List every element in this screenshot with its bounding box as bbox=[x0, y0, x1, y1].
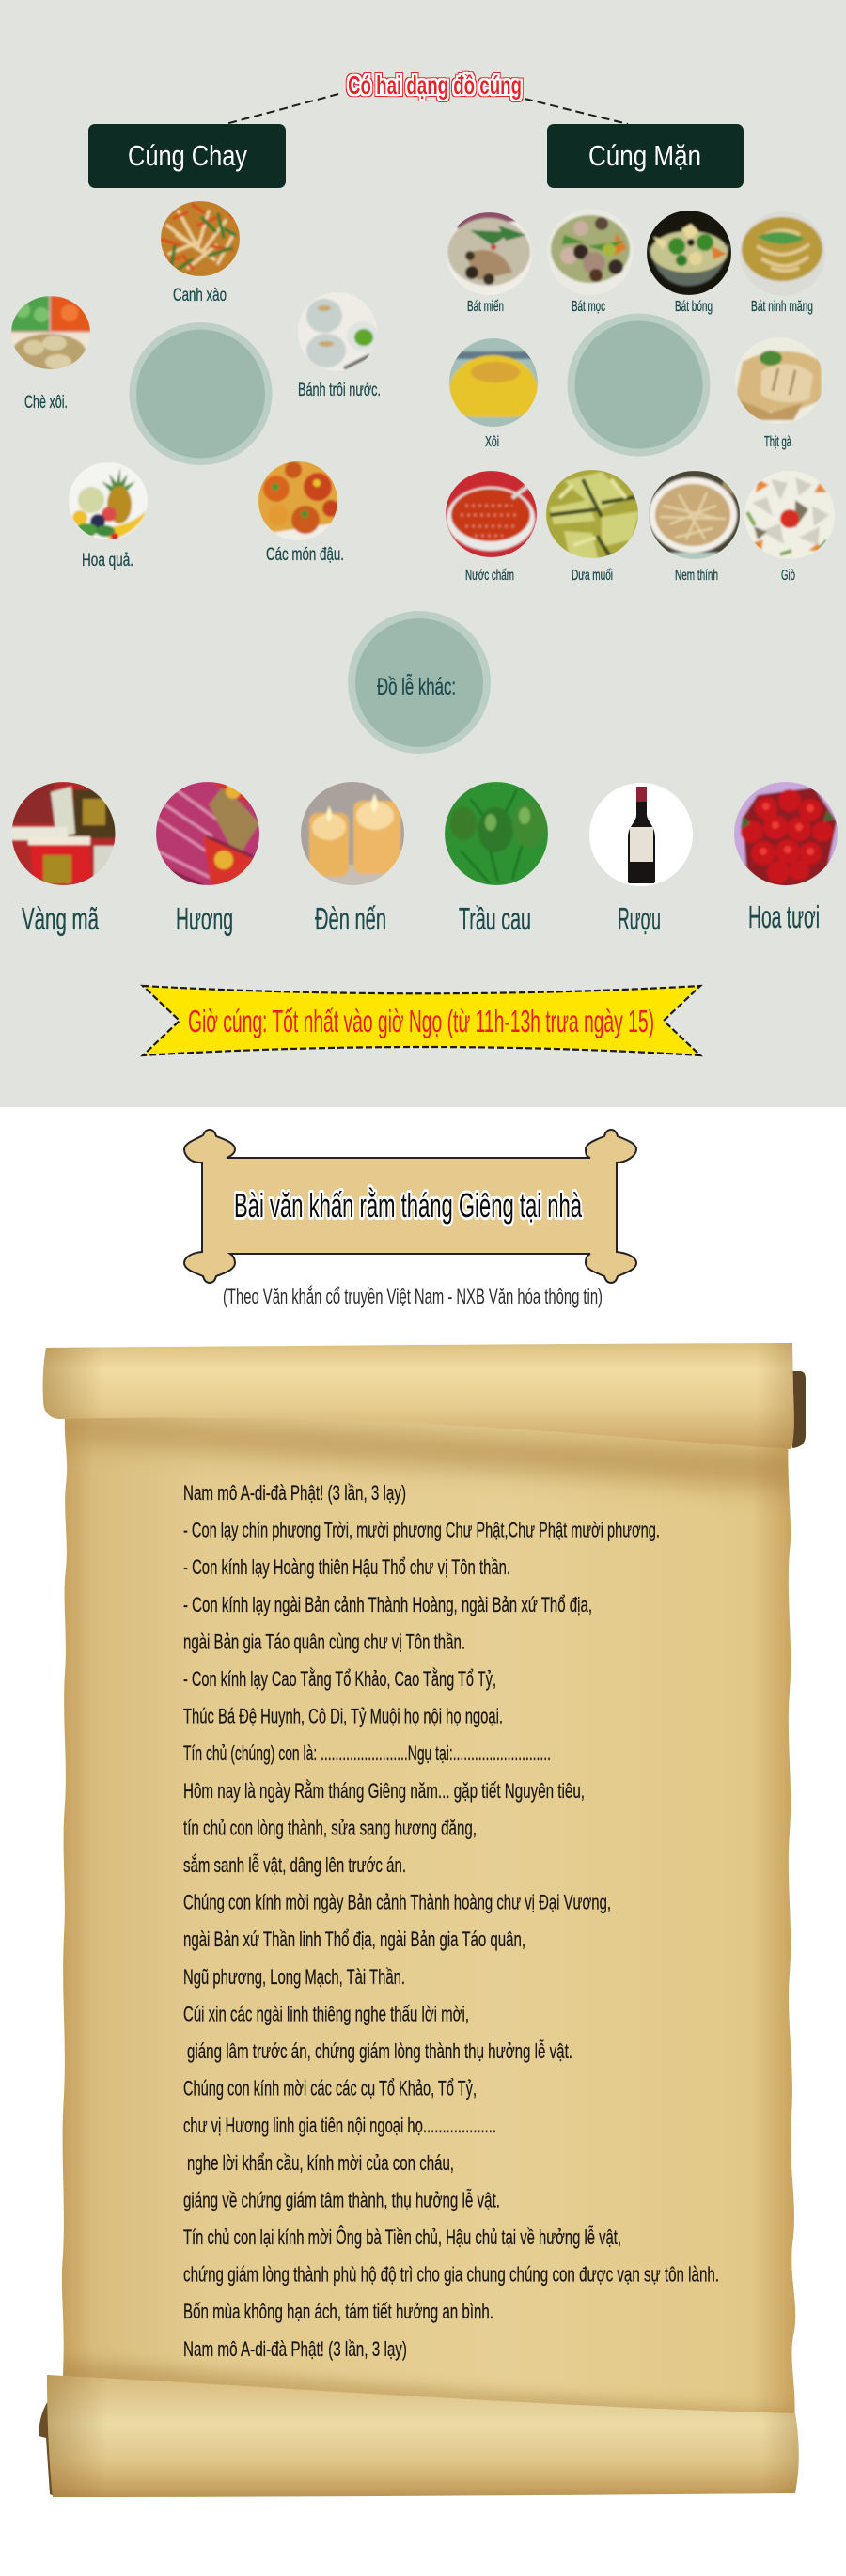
top roll back end bbox=[790, 1371, 806, 1448]
prayer text bbox=[183, 1481, 719, 2361]
icon: rice balls bbox=[297, 291, 379, 372]
icon: boiled chicken bbox=[734, 336, 824, 425]
panel: vegetarian offerings bbox=[10, 124, 381, 570]
label: Nước chấm bbox=[465, 568, 514, 584]
label: Vàng mã bbox=[22, 901, 99, 936]
icon: betel and areca bbox=[444, 781, 549, 888]
icon: sticky rice and sweet soup bbox=[10, 296, 91, 373]
icon: candles bbox=[300, 781, 405, 887]
label: Dưa muối bbox=[572, 568, 613, 584]
heading: Cúng Mặn bbox=[547, 124, 744, 188]
prayer text: Thúc Bá Đệ Huynh, Cô Di, Tỷ Muội họ nội họ ngoại. bbox=[183, 1705, 503, 1728]
prayer text: Tín chủ con lại kính mời Ông bà Tiền chủ, Hậu chủ tại về hưởng lễ vật, bbox=[183, 2225, 621, 2249]
item: Bát ninh măng bbox=[739, 211, 826, 315]
shadow below top roll bbox=[56, 1414, 799, 1490]
icon: shredded pork bbox=[648, 470, 741, 560]
item: Bát bóng bbox=[646, 210, 732, 315]
label: Bát mọc bbox=[572, 299, 605, 315]
icon: red roses bbox=[733, 781, 838, 887]
label: Các món đậu. bbox=[266, 545, 344, 565]
prayer text: Nam mô A-di-đà Phật! (3 lần, 3 lạy) bbox=[183, 2337, 407, 2361]
icon: pickled greens bbox=[545, 469, 639, 559]
heading: prayer title scroll bbox=[184, 1130, 636, 1283]
label: Đèn nến bbox=[315, 901, 386, 936]
title text: Bài văn khấn rằm tháng Giêng tại nhà bbox=[234, 1186, 583, 1225]
item: Rượu bbox=[588, 782, 694, 936]
item: Nước chấm bbox=[445, 470, 538, 584]
item: Nem thính bbox=[648, 470, 741, 584]
prayer text: tín chủ con lòng thành, sửa sang hương đăng, bbox=[183, 1816, 477, 1839]
label: Thịt gà bbox=[764, 434, 791, 450]
item: Chè xôi bbox=[10, 296, 91, 413]
item: Trầu cau bbox=[444, 781, 549, 936]
prayer text: - Con kính lạy Hoàng thiên Hậu Thổ chư vị Tôn thần. bbox=[183, 1555, 510, 1579]
item: Hoa quả bbox=[68, 461, 149, 570]
item: Hương bbox=[155, 780, 260, 936]
label: Chè xôi. bbox=[24, 393, 68, 413]
label: Bát ninh măng bbox=[751, 299, 813, 315]
label: Hương bbox=[176, 901, 233, 936]
icon: bamboo soup bbox=[740, 214, 825, 284]
label: Bánh trôi nước. bbox=[298, 381, 381, 400]
item: Canh xào bbox=[160, 200, 241, 305]
label: Bát miến bbox=[467, 299, 504, 315]
circle: Đồ lễ khác bbox=[348, 611, 491, 754]
prayer text: giáng lâm trước án, chứng giám lòng thành thụ hưởng lễ vật. bbox=[187, 2039, 572, 2063]
prayer text: ngài Bản xứ Thần linh Thổ địa, ngài Bản gia Táo quân, bbox=[183, 1928, 525, 1951]
item: Hoa tươi bbox=[733, 781, 838, 934]
prayer text: Hôm nay là ngày Rằm tháng Giêng năm... gặp tiết Nguyên tiêu, bbox=[183, 1779, 585, 1803]
label: Trầu cau bbox=[459, 901, 531, 936]
heading: Cúng Chay bbox=[88, 124, 286, 188]
centre circle bbox=[568, 314, 711, 457]
label: Giò bbox=[781, 568, 795, 584]
label: Hoa quả. bbox=[82, 551, 133, 570]
prayer text: Bốn mùa không hạn ách, tám tiết hưởng an bình. bbox=[183, 2300, 494, 2323]
centre circle bbox=[130, 322, 273, 465]
icon: sticky rice bbox=[448, 337, 539, 428]
label: Xôi bbox=[485, 434, 499, 450]
title: two kinds of offerings: Có hai dạng đồ cúng bbox=[348, 70, 522, 100]
label: Nem thính bbox=[675, 568, 718, 584]
icon: pork skin soup bbox=[646, 210, 732, 296]
icon: noodle bowl bbox=[446, 211, 533, 296]
item: Vàng mã bbox=[11, 781, 117, 936]
prayer text: Tín chủ (chúng) con là: ........................Ngụ tại:........................... bbox=[183, 1741, 551, 1765]
prayer text: Nam mô A-di-đà Phật! (3 lần, 3 lạy) bbox=[183, 1481, 406, 1505]
item: Xôi bbox=[448, 337, 539, 450]
panel: offerings background bbox=[0, 0, 846, 1107]
icon: wine bottle bbox=[588, 782, 694, 887]
heading: Cúng Mặn: Cúng Mặn bbox=[588, 139, 701, 172]
item: Bát mọc bbox=[547, 208, 634, 315]
bottom roll bbox=[47, 2375, 799, 2497]
icon: fruit bbox=[68, 461, 149, 540]
item: Dưa muối bbox=[545, 469, 639, 584]
prayer text: - Con kính lạy Cao Tằng Tổ Khảo, Cao Tằng Tổ Tỷ, bbox=[183, 1667, 496, 1691]
bottom roll dark end bbox=[39, 2394, 57, 2497]
icon: meatball soup bbox=[547, 208, 634, 296]
prayer text: Chúng con kính mời các các cụ Tổ Khảo, Tổ Tỷ, bbox=[183, 2077, 477, 2100]
source note: (Theo Văn khắn cổ truyền Việt Nam - NXB Văn hóa thông tin) bbox=[223, 1285, 603, 1308]
icon: pork roll platter bbox=[744, 470, 836, 560]
icon: dipping sauce bbox=[445, 470, 538, 558]
prayer text: sắm sanh lễ vật, dâng lên trước án. bbox=[183, 1853, 406, 1877]
shadow above bottom roll bbox=[56, 2359, 799, 2429]
prayer text: Ngũ phương, Long Mạch, Tài Thần. bbox=[183, 1965, 405, 1989]
panel: other ritual items bbox=[11, 611, 838, 936]
prayer text: - Con kính lạy ngài Bản cảnh Thành Hoàng, ngài Bản xứ Thổ địa, bbox=[183, 1593, 592, 1616]
prayer text: Cúi xin các ngài linh thiêng nghe thấu lời mời, bbox=[183, 2002, 469, 2025]
banner: best worship time bbox=[143, 986, 700, 1055]
top roll bbox=[43, 1343, 794, 1449]
item: Giò bbox=[744, 470, 836, 584]
label: Canh xào bbox=[173, 286, 227, 305]
prayer text: Chúng con kính mời ngày Bản cảnh Thành hoàng chư vị Đại Vương, bbox=[183, 1891, 611, 1914]
item: Bát miến bbox=[446, 211, 533, 315]
prayer text: giáng về chứng giám tâm thành, thụ hưởng lễ vật. bbox=[183, 2188, 500, 2211]
item: Bánh trôi nước bbox=[297, 291, 381, 400]
icon: votive paper bbox=[11, 781, 117, 886]
item: Thịt gà bbox=[734, 336, 824, 450]
panel: parchment scroll bbox=[39, 1343, 806, 2497]
circle: Đồ lễ khác: Đồ lễ khác: bbox=[377, 673, 456, 700]
prayer text: ngài Bản gia Táo quân cùng chư vị Tôn thần. bbox=[183, 1630, 465, 1653]
panel: savoury offerings bbox=[445, 124, 836, 584]
label: Bát bóng bbox=[675, 299, 713, 315]
prayer text: nghe lời khẩn cầu, kính mời của con cháu, bbox=[187, 2151, 454, 2175]
dashed connector lines bbox=[226, 94, 628, 124]
icon: tofu dishes bbox=[258, 461, 339, 543]
icon: incense bbox=[155, 780, 260, 886]
item: Đèn nến bbox=[300, 781, 405, 936]
prayer text: chư vị Hương linh gia tiên nội ngoại họ................... bbox=[183, 2114, 496, 2137]
parchment sheet bbox=[56, 1400, 804, 2429]
item: Các món đậu bbox=[258, 461, 344, 565]
scroll plaque bbox=[184, 1130, 636, 1283]
heading: Cúng Chay: Cúng Chay bbox=[128, 139, 247, 172]
label: Rượu bbox=[618, 901, 661, 936]
icon: stir-fry bbox=[160, 200, 241, 277]
